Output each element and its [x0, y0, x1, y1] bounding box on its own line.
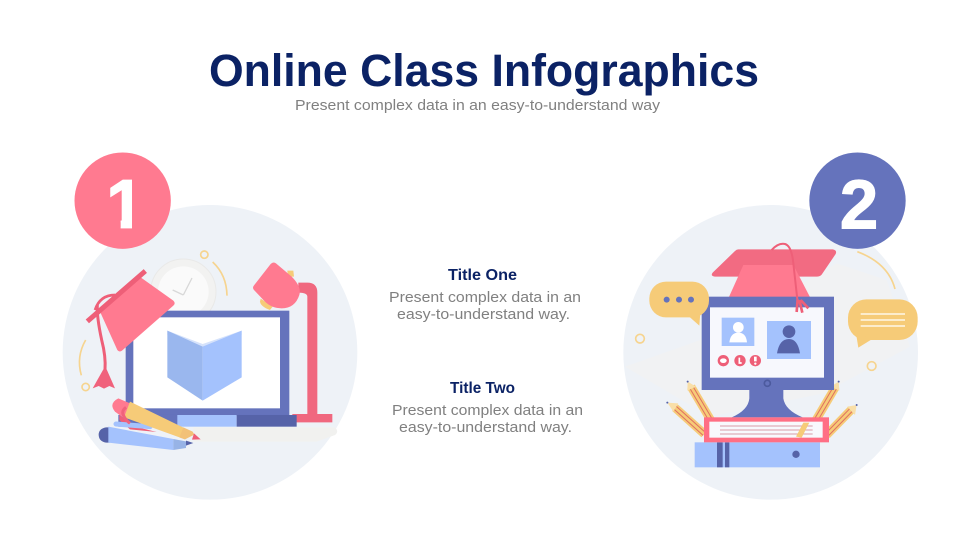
- faint background shape: [625, 263, 910, 417]
- text block: title two: [392, 380, 583, 436]
- text block: title one: Title One: [448, 267, 517, 284]
- decorative rings and arc: [636, 252, 895, 370]
- icon: graduation cap: [87, 271, 175, 389]
- text block: title two: easy-to-understand way.: [399, 420, 572, 436]
- icon: clock: [151, 259, 216, 324]
- badge 2: 2: [840, 165, 878, 243]
- title: Online Class Infographics: [209, 45, 759, 96]
- icons: pencils: [666, 381, 858, 435]
- background circle one: [63, 205, 357, 500]
- cap tassel: [772, 244, 808, 313]
- icon: speech bubble with lines: [848, 299, 918, 348]
- text block: title two: Present complex data in an: [392, 403, 583, 419]
- subtitle: Present complex data in an easy-to-understand way: [295, 97, 661, 114]
- icon: speech bubble with dots: [649, 282, 709, 326]
- text block: title one: easy-to-understand way.: [397, 307, 570, 323]
- decorative rings and arcs: [79, 251, 227, 391]
- text block: title one: Present complex data in an: [389, 290, 581, 306]
- icons: reactions: [718, 355, 761, 366]
- panel: illustration one: [63, 152, 357, 500]
- text block: title one: [389, 267, 581, 323]
- icon: monitor: [702, 297, 834, 417]
- icon: open book: [167, 331, 242, 401]
- badge 2: [809, 152, 906, 249]
- badge 1: 1: [106, 165, 145, 243]
- text block: title two: Title Two: [450, 380, 515, 397]
- video tile: teacher: [767, 321, 811, 359]
- badge 1: [74, 152, 171, 249]
- icon: stacked books: [695, 417, 829, 467]
- icon: pens and pencil: [99, 398, 201, 450]
- background circle two: [623, 205, 918, 500]
- desk shadow: [193, 427, 337, 442]
- icon: desk lamp: [253, 262, 332, 422]
- panel: illustration two: [623, 152, 918, 500]
- video tile: student: [722, 318, 754, 346]
- icon: laptop: [118, 311, 297, 427]
- icon: graduation cap: [712, 249, 836, 298]
